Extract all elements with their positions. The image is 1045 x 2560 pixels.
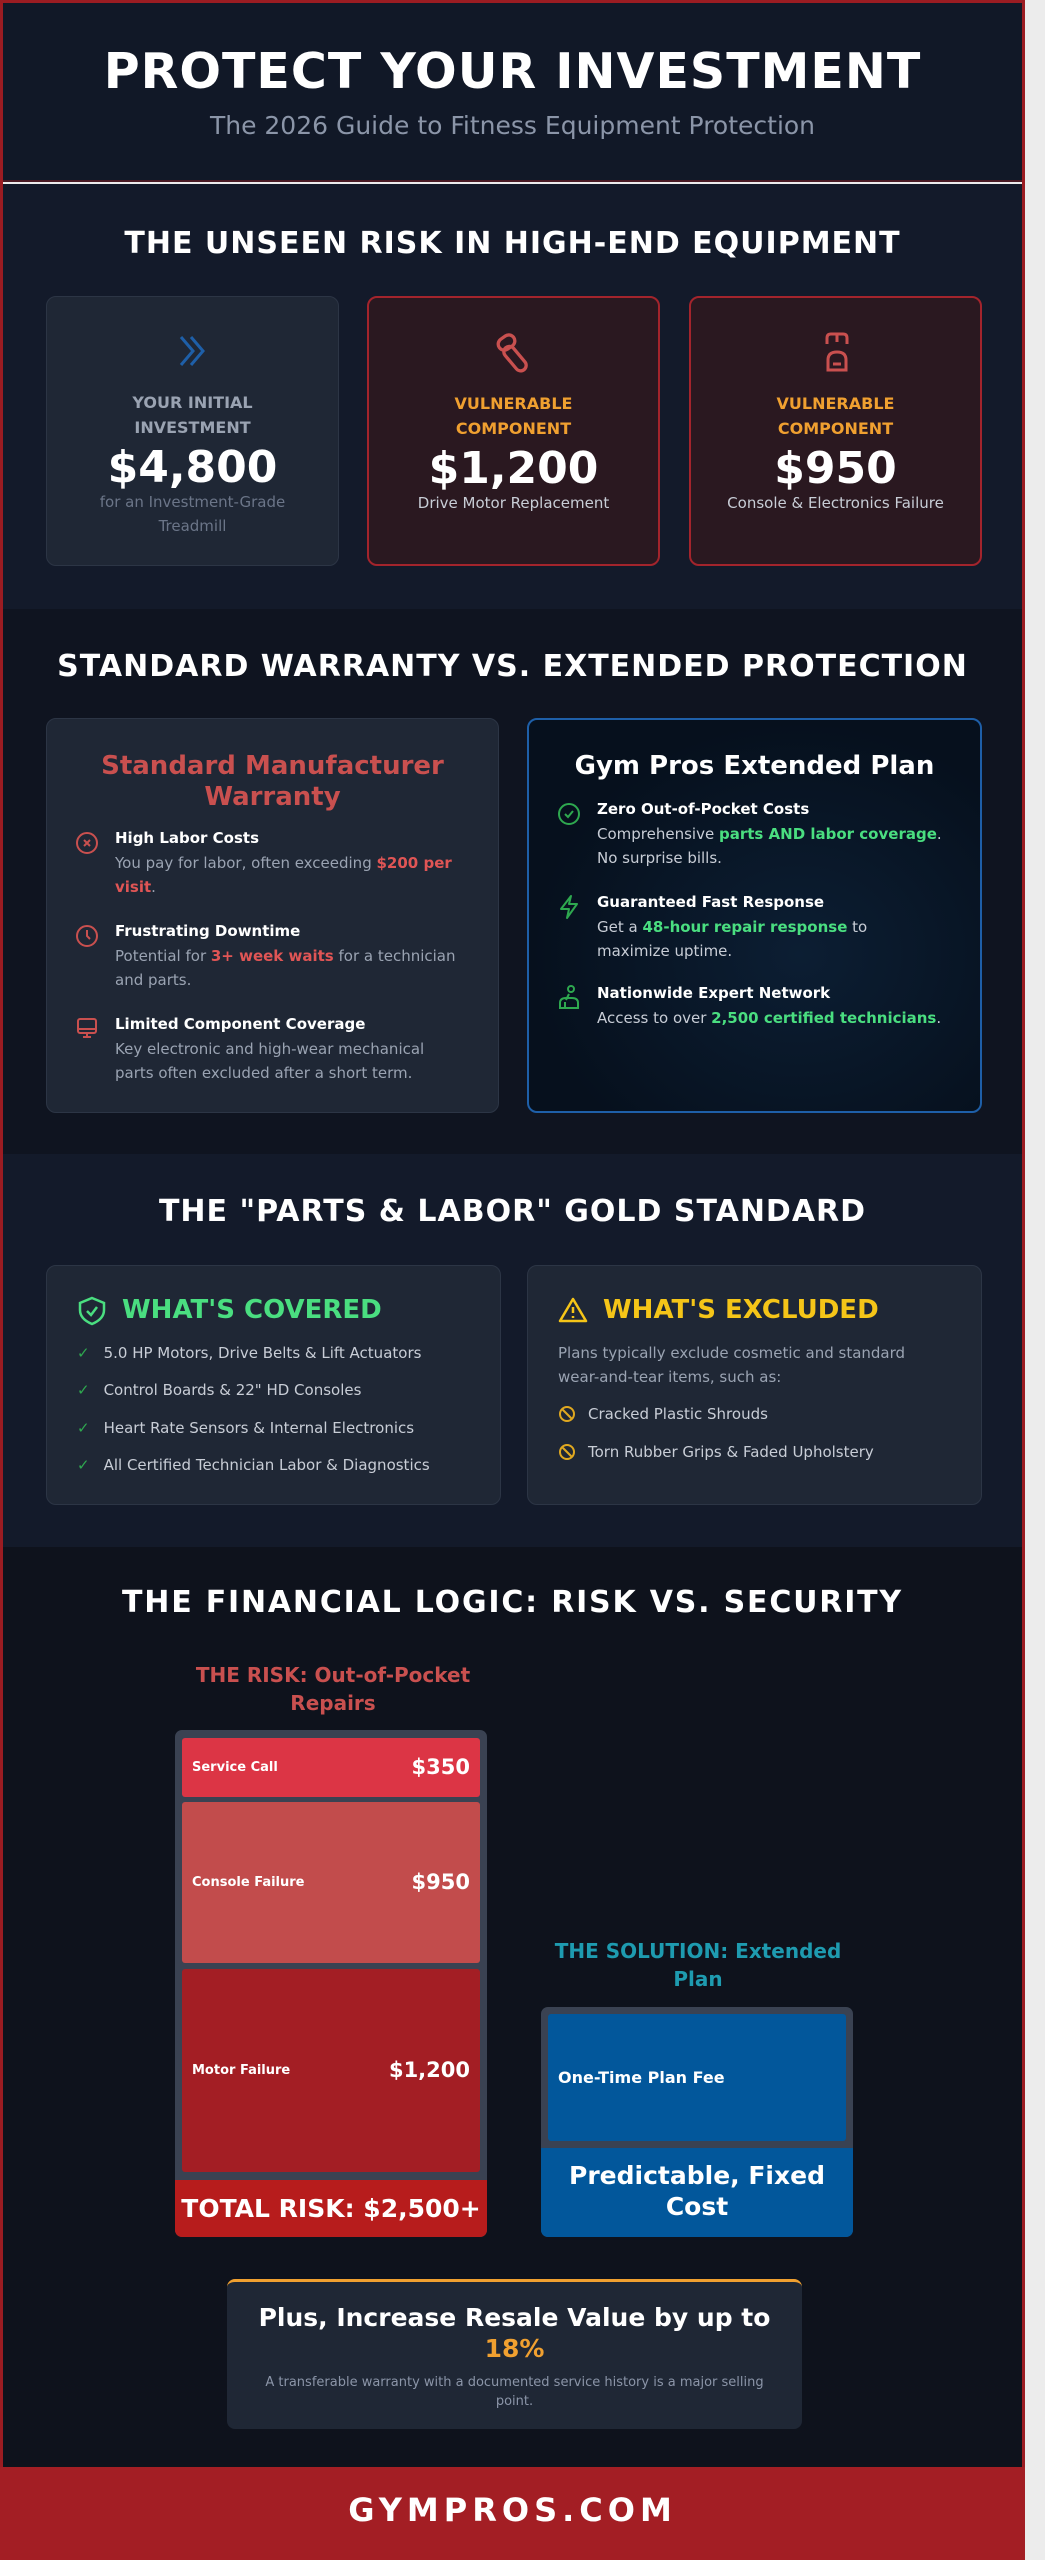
segment: console failure — [182, 1802, 480, 1963]
segment: service call: Service Call — [192, 1760, 278, 1775]
item: zero cost — [558, 800, 942, 867]
segment: console failure: Console Failure — [192, 1875, 304, 1890]
covered list — [77, 1344, 430, 1474]
segment: motor failure: $1,200 — [389, 2058, 470, 2082]
callout: resale value: Plus, Increase Resale Value by up to — [259, 2303, 770, 2332]
icon: shield — [78, 1296, 106, 1326]
card: console — [689, 296, 982, 566]
excluded description: Plans typically exclude cosmetic and standard wear-and-tear items, such as: — [558, 1344, 905, 1386]
icon: technician — [559, 985, 579, 1009]
callout: resale value: A transferable warranty with a documented service history is a major selling point. — [265, 2375, 764, 2409]
item: fast response: Get a 48-hour repair response to maximize uptime. — [597, 918, 867, 960]
excluded list: Torn Rubber Grips & Faded Upholstery — [588, 1443, 874, 1461]
callout: resale value — [227, 2279, 802, 2429]
subtitle: The 2026 Guide to Fitness Equipment Protection — [210, 111, 815, 140]
item: network: Nationwide Expert Network — [597, 984, 830, 1002]
item: limited coverage — [77, 1015, 424, 1082]
item: zero cost: Comprehensive parts AND labor coverage. No surprise bills. — [597, 825, 942, 867]
label: YOUR INITIAL — [132, 393, 253, 412]
card: initial investment — [46, 296, 339, 566]
fixed cost — [541, 2148, 853, 2237]
panel: standard warranty — [46, 718, 499, 1113]
item: zero cost: Zero Out-of-Pocket Costs — [597, 800, 809, 818]
fixed cost: Predictable, Fixed — [569, 2161, 825, 2190]
header — [3, 3, 1022, 182]
icon: chevrons — [180, 336, 205, 366]
solution label — [554, 1939, 841, 1991]
total risk: TOTAL RISK: $2,500+ — [181, 2194, 481, 2223]
segment: console failure: $950 — [412, 1870, 470, 1894]
item: downtime: Frustrating Downtime — [115, 922, 300, 940]
risk label — [196, 1663, 470, 1715]
item: downtime: Potential for 3+ week waits for a technician and parts. — [115, 947, 456, 989]
sub — [100, 493, 285, 535]
item: network: Access to over 2,500 certified technicians. — [597, 1009, 941, 1027]
item: labor costs: High Labor Costs — [115, 829, 259, 847]
item: network — [559, 984, 941, 1027]
panel title — [101, 751, 444, 812]
item: limited coverage: Key electronic and high-wear mechanical parts often excluded after a short term. — [115, 1040, 424, 1082]
icon: lightning — [560, 895, 578, 919]
icon: x circle — [76, 832, 98, 854]
sub: Console & Electronics Failure — [727, 494, 944, 512]
footer: GYMPROS.COM — [348, 2491, 677, 2529]
excluded list — [559, 1405, 874, 1461]
item: downtime — [76, 922, 456, 989]
item: fast response — [560, 893, 867, 960]
heading: STANDARD WARRANTY VS. EXTENDED PROTECTION — [57, 649, 968, 684]
fixed cost: Cost — [666, 2192, 728, 2221]
label — [776, 394, 894, 438]
card: drive motor — [367, 296, 660, 566]
sub: Treadmill — [159, 517, 226, 535]
risk label: THE RISK: Out-of-Pocket — [196, 1663, 470, 1687]
panel title: Gym Pros Extended Plan — [575, 751, 934, 781]
icon: warning — [558, 1298, 588, 1322]
segment: plan fee — [548, 2014, 846, 2141]
panel: extended plan — [527, 718, 982, 1113]
excluded list: Cracked Plastic Shrouds — [588, 1405, 768, 1423]
label: VULNERABLE — [455, 394, 572, 413]
solution label: THE SOLUTION: Extended — [555, 1939, 841, 1963]
value: $1,200 — [429, 443, 598, 494]
panel title: Warranty — [204, 782, 341, 812]
segment: service call — [182, 1738, 480, 1797]
section: parts and labor — [3, 1154, 1022, 1547]
label — [132, 393, 253, 437]
icon: check circle — [558, 803, 580, 825]
covered list: ✓ Control Boards & 22" HD Consoles — [77, 1381, 361, 1399]
label — [454, 394, 572, 438]
segment: service call: $350 — [412, 1755, 470, 1779]
chart: solution — [541, 2007, 853, 2237]
chart: risk stack — [175, 1730, 487, 2237]
icon: monitor — [77, 1018, 97, 1038]
section: warranty comparison — [3, 609, 1022, 1154]
label: INVESTMENT — [134, 418, 251, 437]
panel: excluded — [527, 1265, 982, 1505]
value: $950 — [774, 443, 897, 494]
heading: THE UNSEEN RISK IN HIGH-END EQUIPMENT — [124, 226, 901, 261]
sub: for an Investment-Grade — [100, 493, 285, 511]
covered heading: WHAT'S COVERED — [122, 1295, 382, 1325]
section: unseen risk — [3, 184, 1022, 609]
total risk — [175, 2180, 487, 2237]
panel title: Standard Manufacturer — [101, 751, 444, 781]
covered list: ✓ All Certified Technician Labor & Diagnostics — [77, 1456, 430, 1474]
icon: wrench — [496, 333, 528, 372]
heading: THE "PARTS & LABOR" GOLD STANDARD — [159, 1194, 866, 1229]
icon: console — [826, 332, 848, 372]
heading: THE FINANCIAL LOGIC: RISK VS. SECURITY — [122, 1585, 903, 1620]
risk label: Repairs — [290, 1691, 376, 1715]
solution label: Plan — [673, 1967, 723, 1991]
icon: clock — [76, 925, 98, 947]
item: labor costs — [76, 829, 452, 896]
callout: resale value: 18% — [485, 2334, 544, 2363]
covered list: ✓ Heart Rate Sensors & Internal Electronics — [77, 1419, 414, 1437]
covered list: ✓ 5.0 HP Motors, Drive Belts & Lift Actuators — [77, 1344, 421, 1362]
segment: plan fee: One-Time Plan Fee — [558, 2068, 725, 2087]
segment: motor failure — [182, 1969, 480, 2172]
segment: motor failure: Motor Failure — [192, 2063, 290, 2078]
label: VULNERABLE — [777, 394, 894, 413]
label: COMPONENT — [456, 419, 571, 438]
title: PROTECT YOUR INVESTMENT — [104, 43, 921, 100]
panel: covered — [46, 1265, 501, 1505]
excluded heading: WHAT'S EXCLUDED — [603, 1295, 879, 1325]
item: fast response: Guaranteed Fast Response — [597, 893, 824, 911]
value: $4,800 — [108, 442, 277, 493]
item: labor costs: You pay for labor, often exceeding $200 per visit. — [115, 854, 452, 896]
item: limited coverage: Limited Component Coverage — [115, 1015, 365, 1033]
section: financial logic — [3, 1547, 1022, 2470]
footer — [0, 2467, 1025, 2560]
label: COMPONENT — [778, 419, 893, 438]
sub: Drive Motor Replacement — [418, 494, 609, 512]
